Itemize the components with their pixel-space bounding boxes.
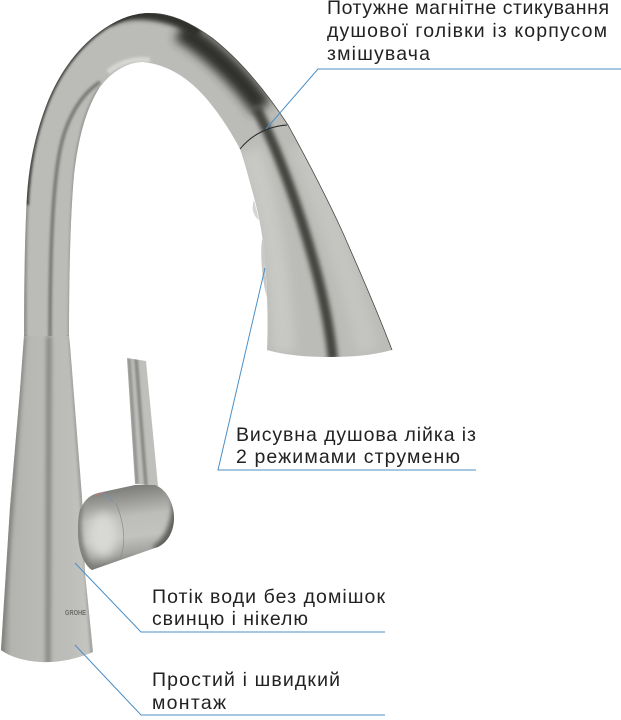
faucet body bbox=[0, 336, 95, 666]
spray button bottom bbox=[261, 240, 267, 298]
inner arch highlight bbox=[108, 60, 150, 72]
callout text: Висувна душова лійка із bbox=[236, 424, 476, 446]
callout: pull-out spray bbox=[218, 268, 476, 470]
spray button top bbox=[253, 200, 259, 220]
callout text: 2 режимами струменю bbox=[236, 446, 460, 468]
outer edge shading bbox=[25, 200, 27, 340]
callout text: монтаж bbox=[152, 692, 226, 714]
callout text: Потік води без домішок bbox=[152, 586, 385, 608]
spout base seam bbox=[24, 336, 69, 338]
leader line bbox=[218, 268, 476, 470]
callout: easy installation bbox=[75, 645, 385, 715]
cylinder cap line bbox=[116, 503, 124, 558]
spout head dark band bbox=[256, 108, 333, 360]
leader line bbox=[75, 563, 385, 632]
temperature marks bbox=[95, 493, 104, 495]
head light band bbox=[250, 150, 284, 352]
callout text: Простий і швидкий bbox=[152, 669, 340, 691]
callout text: душової голівки із корпусом bbox=[327, 20, 607, 42]
mixer cylinder bbox=[78, 485, 174, 570]
leader line bbox=[75, 645, 385, 715]
faucet handle bbox=[78, 358, 174, 570]
spout arch and pull-out head bbox=[24, 13, 392, 357]
spout outer edge bbox=[150, 13, 392, 350]
callout text: змішувача bbox=[327, 43, 430, 65]
inner tube crease bbox=[50, 82, 100, 340]
GROHE logo: GROHE bbox=[65, 610, 86, 617]
leader line bbox=[266, 69, 621, 129]
callout text: свинцю і нікелю bbox=[152, 608, 308, 630]
faucet bbox=[0, 0, 420, 666]
lever bbox=[127, 358, 158, 486]
callout: clean water bbox=[75, 563, 385, 632]
magnetic docking seam bbox=[240, 125, 287, 149]
callout: magnetic docking bbox=[266, 0, 621, 129]
